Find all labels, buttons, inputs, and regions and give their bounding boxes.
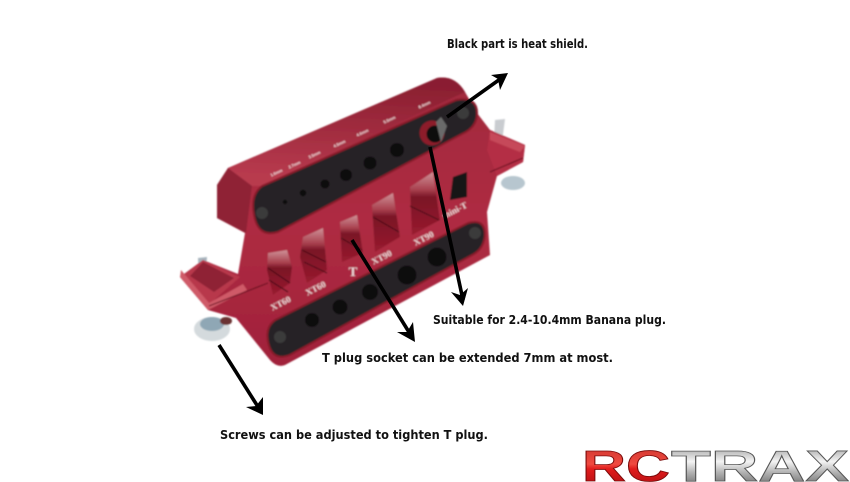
caption: heat shield: Black part is heat shield. xyxy=(447,37,588,51)
size labels xyxy=(270,100,432,178)
parting line xyxy=(209,158,523,306)
size labels: 2.7mm xyxy=(288,160,302,170)
upper black plate xyxy=(253,99,477,233)
size labels: 1.6mm xyxy=(270,168,284,178)
slot labels: XT90 xyxy=(370,248,394,267)
logo: RCTRAX xyxy=(582,442,849,482)
slot shading xyxy=(268,206,439,292)
slot labels: XT90 xyxy=(412,229,436,248)
upper plate holes xyxy=(256,107,469,219)
arrow: heat shield xyxy=(447,73,508,117)
slot labels xyxy=(269,200,469,313)
right flange xyxy=(487,130,525,176)
slot labels: mini-T xyxy=(441,200,469,221)
size labels: 4.6mm xyxy=(356,128,370,138)
screw: upper right xyxy=(494,119,525,190)
product photo: plug soldering jig xyxy=(180,78,525,366)
slot labels: T xyxy=(349,264,358,279)
caption: T plug socket: T plug socket can be extended 7mm at most. xyxy=(322,351,613,365)
arrow: banana plug xyxy=(430,147,468,306)
caption: screws: Screws can be adjusted to tighten T plug. xyxy=(220,428,488,442)
connector slots xyxy=(267,172,440,295)
size labels: 8.4mm xyxy=(418,100,432,110)
banana socket xyxy=(420,117,447,146)
jig top face xyxy=(228,78,465,186)
lower black plate xyxy=(267,222,485,357)
thumb screw xyxy=(194,317,232,341)
size labels: 4.5mm xyxy=(333,139,347,149)
size labels: 3.5mm xyxy=(308,150,322,160)
left flange xyxy=(180,260,247,310)
mini-T slot xyxy=(450,172,467,200)
slot labels: XT60 xyxy=(269,294,293,313)
lower plate holes xyxy=(274,227,481,343)
slot labels: XT60 xyxy=(304,279,328,298)
arrow: screws xyxy=(219,345,263,415)
caption: banana plug: Suitable for 2.4-10.4mm Banana plug. xyxy=(433,313,666,327)
arrow: T plug socket xyxy=(352,240,415,342)
screw: upper left xyxy=(198,257,207,282)
jig body xyxy=(180,78,525,366)
size labels: 5.5mm xyxy=(383,115,397,125)
jig left side xyxy=(217,168,252,233)
